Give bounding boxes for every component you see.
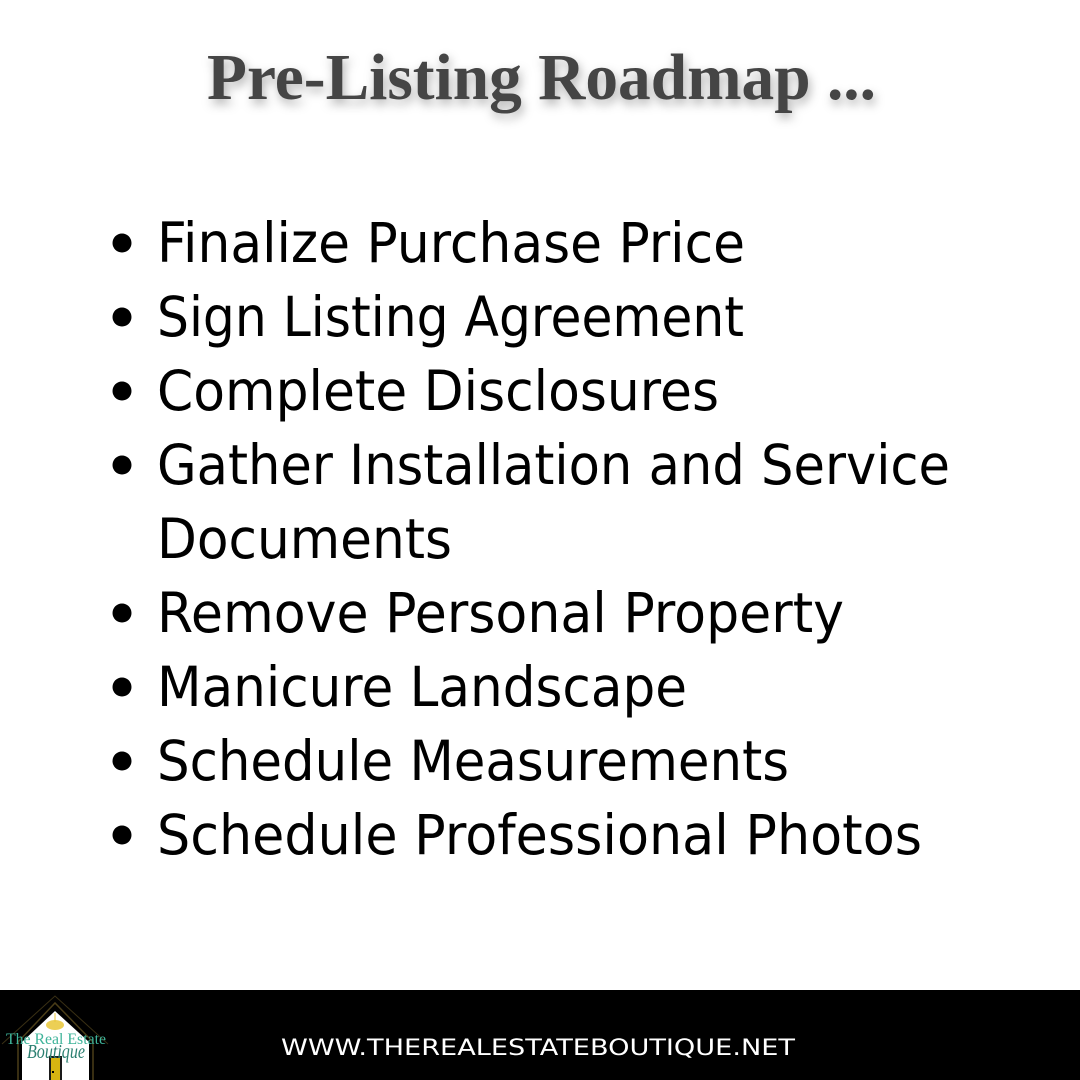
footer bar	[0, 990, 1080, 1080]
title: Pre-Listing Roadmap ...	[207, 41, 876, 114]
list item: finalize purchase price: Finalize Purchase Price	[157, 211, 745, 275]
list item: schedule measurements: Schedule Measurements	[157, 729, 789, 793]
list item: complete disclosures: Complete Disclosures	[157, 359, 719, 423]
list item: gather installation and service documents: Gather Installation and Service	[157, 433, 950, 497]
list item: manicure landscape: Manicure Landscape	[157, 655, 687, 719]
logo script: Boutique	[27, 1041, 85, 1063]
footer logo	[2, 996, 108, 1080]
icon: white house	[22, 1011, 89, 1080]
logo name: The Real Estate	[6, 1031, 106, 1048]
icon: chandelier	[46, 1013, 64, 1030]
website url: WWW.THEREALESTATEBOUTIQUE.NET	[281, 1036, 796, 1061]
icon: house outline	[2, 996, 108, 1044]
list item: sign listing agreement: Sign Listing Agreement	[157, 285, 744, 349]
list item: remove personal property: Remove Personal Property	[157, 581, 844, 645]
list item: gather installation and service documents	[112, 433, 950, 571]
icon: door	[49, 1056, 62, 1080]
list item: gather installation and service documents: Documents	[157, 507, 452, 571]
bullet list	[112, 211, 950, 867]
list item: schedule professional photos: Schedule Professional Photos	[157, 803, 922, 867]
